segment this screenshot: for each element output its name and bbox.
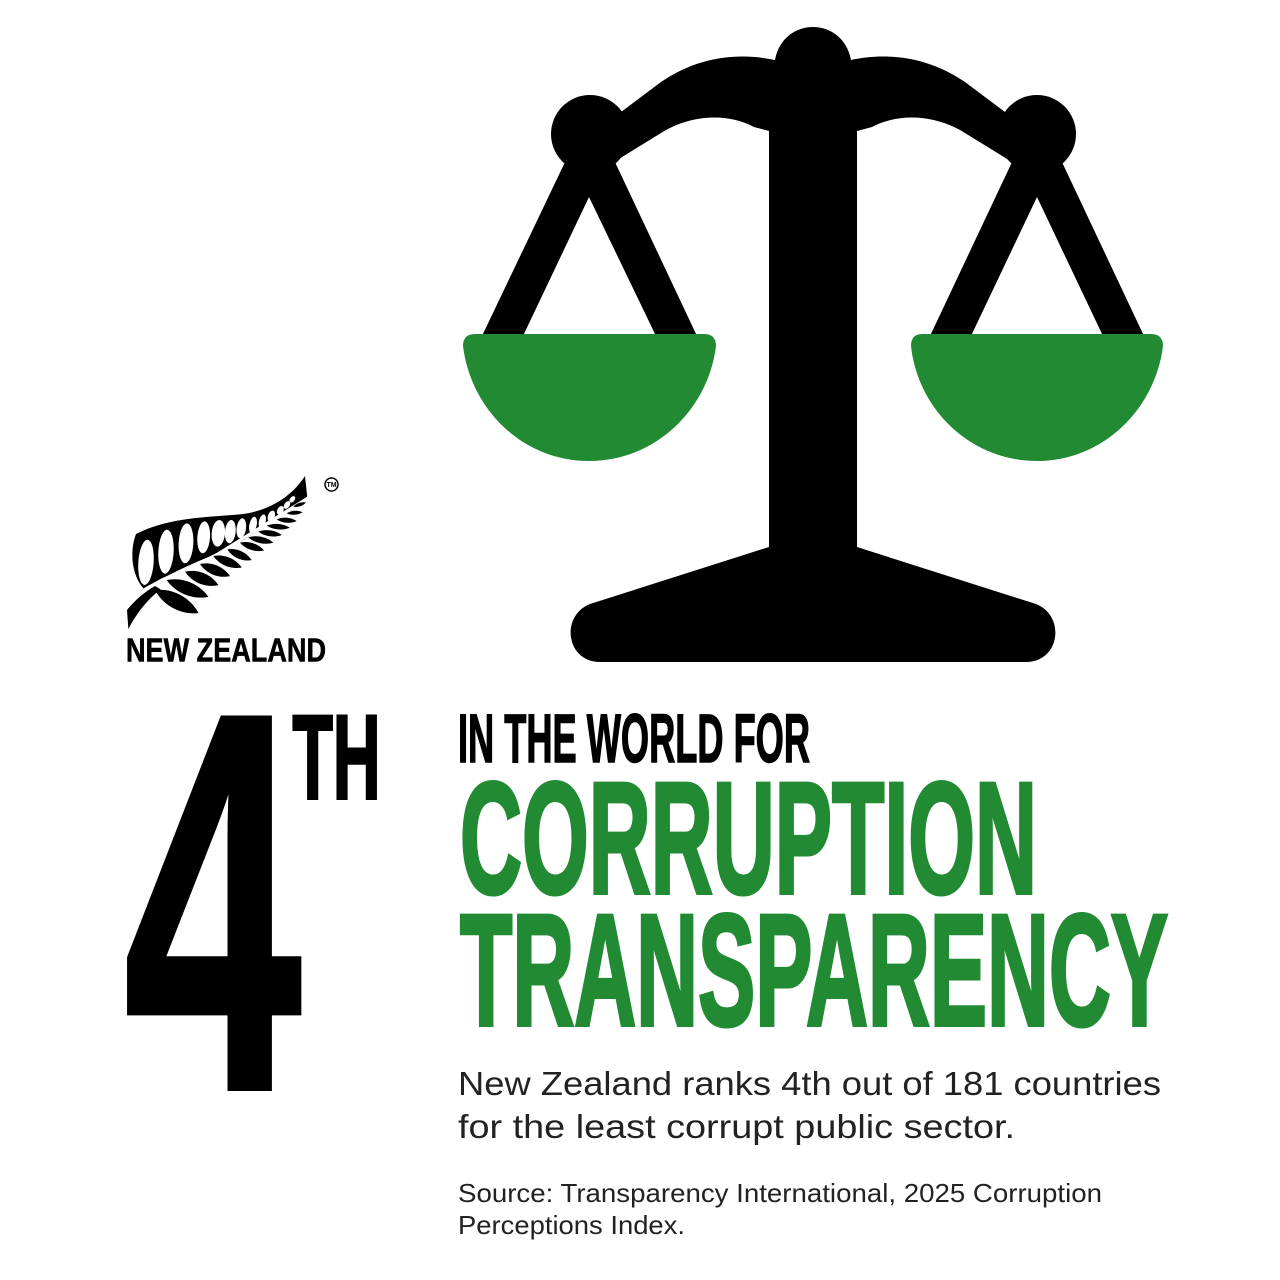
description text: [458, 1065, 1161, 1145]
description text: New Zealand ranks 4th out of 181 countries: [458, 1065, 1161, 1102]
big rank number 4: 4: [123, 601, 304, 1204]
fern symbol: [127, 476, 308, 629]
trademark symbol: [325, 478, 338, 491]
logo: New Zealand fern mark: [126, 476, 338, 670]
scale beam and stand: [571, 27, 1055, 662]
left pan: [463, 334, 716, 461]
icon: balance scales: [463, 27, 1163, 662]
right pivot: [998, 95, 1076, 173]
left pan hangers: [482, 160, 697, 336]
description text: for the least corrupt public sector.: [458, 1108, 1015, 1145]
heading line: in the world for: IN THE WORLD FOR: [458, 700, 810, 777]
trademark symbol: TM: [326, 482, 337, 489]
source note: Perceptions Index.: [458, 1210, 685, 1240]
right pan hangers: [930, 160, 1144, 336]
left pivot: [551, 95, 629, 173]
right pan: [911, 334, 1163, 461]
source note: [458, 1178, 1102, 1240]
logo wordmark: NEW ZEALAND: [126, 632, 326, 670]
rank suffix TH: TH: [292, 690, 380, 824]
source note: Source: Transparency International, 2025 Corruption: [458, 1178, 1102, 1208]
